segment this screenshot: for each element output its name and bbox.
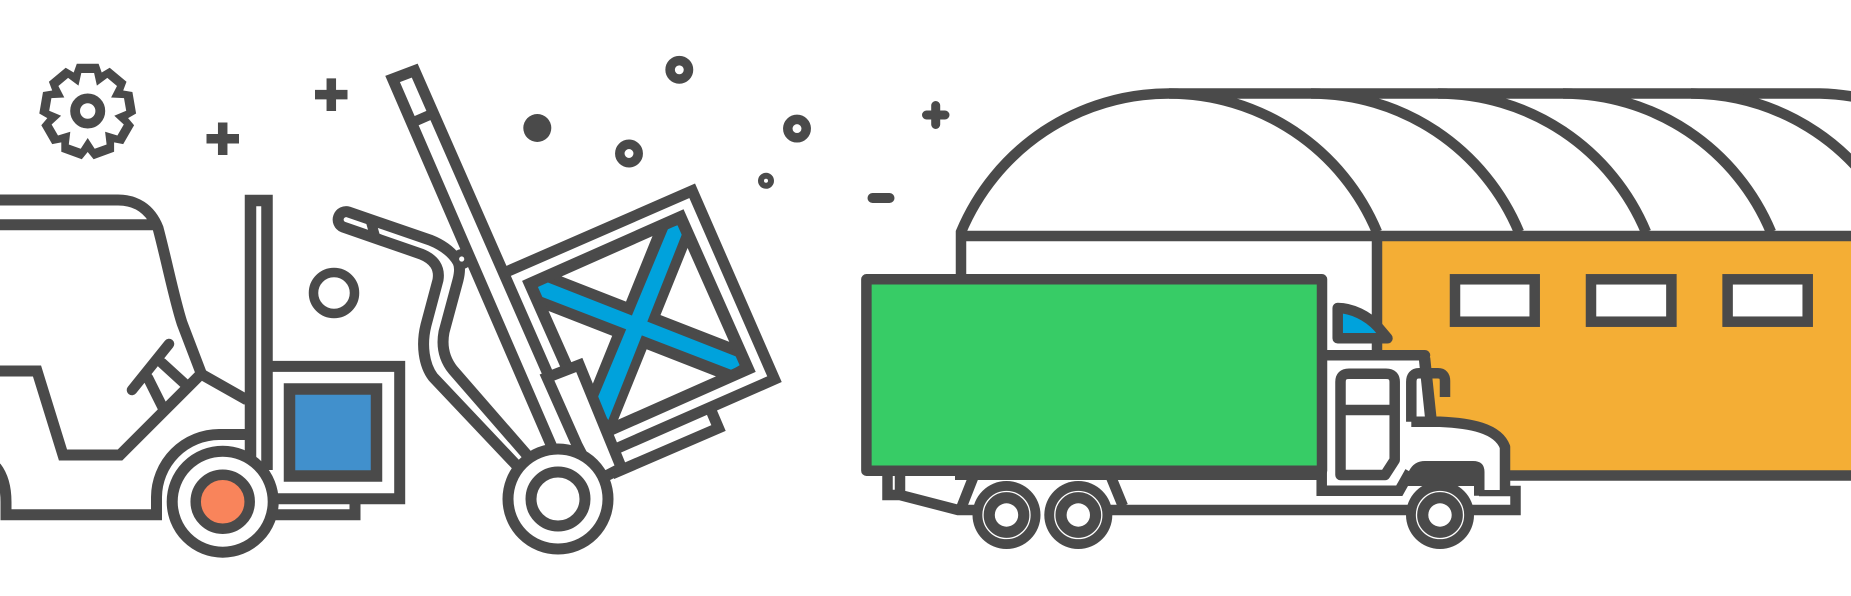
forklift lower fork (275, 503, 355, 515)
rear axle wheel 1 (972, 481, 1040, 549)
forklift wheel (172, 451, 273, 552)
decorations: floating symbols (39, 61, 945, 313)
icon: ring top (670, 61, 688, 79)
hand truck with crate (338, 71, 774, 549)
warehouse base line (1505, 470, 1851, 481)
window 1 (1455, 279, 1535, 322)
cab door (1340, 374, 1395, 475)
main handle bars (393, 71, 580, 447)
icon: gear (39, 64, 136, 159)
rear curved handle (338, 212, 527, 466)
forklift load frame (267, 366, 400, 499)
rear axle wheel 2 (1044, 481, 1112, 549)
forklift body (0, 434, 247, 515)
cab rear wall and sill (1322, 470, 1410, 491)
trailer container (866, 279, 1322, 471)
window 3 (1728, 279, 1808, 322)
trailer floor band (955, 468, 1325, 480)
windscreen post (1424, 358, 1431, 420)
handle cross bar (411, 114, 433, 123)
wheel arch fender (1403, 461, 1484, 496)
icon: filled dot (523, 114, 551, 142)
icon: minus (872, 193, 890, 203)
steering wheel (132, 344, 185, 408)
front wheel (1406, 481, 1474, 549)
forklift cab roof and pillar (0, 200, 203, 378)
cab roof (1322, 350, 1425, 361)
outer load frame (502, 191, 774, 449)
forklift seat and floor (0, 371, 247, 455)
warehouse end walls (961, 236, 1377, 352)
side mirror (1338, 308, 1388, 338)
icon: rounded plus (926, 106, 945, 124)
icon: ring middle (620, 144, 638, 163)
icon: open circle (314, 272, 354, 314)
warehouse (956, 94, 1851, 476)
crate with cross straps (525, 210, 752, 445)
icon: small ring (761, 176, 771, 186)
trailer undercarriage (888, 472, 1516, 510)
hand truck wheel (508, 449, 608, 549)
warehouse roof beam (956, 231, 1851, 241)
warehouse roof arches (961, 94, 1851, 236)
warehouse orange wall (1380, 238, 1851, 473)
forklift mast (250, 200, 267, 470)
rear handle grip bar (371, 222, 376, 238)
icon: plus right (315, 78, 348, 111)
truck (866, 279, 1516, 549)
forklift (0, 200, 400, 552)
icon: plus left (206, 122, 239, 155)
carriage plate (547, 365, 622, 476)
lower fork plate (612, 408, 718, 474)
handle joint (452, 249, 472, 269)
icon: ring right (788, 119, 806, 138)
cab body (1322, 355, 1505, 490)
window 2 (1591, 279, 1671, 322)
cab front and hood (1411, 373, 1505, 490)
blue crate (290, 389, 376, 476)
